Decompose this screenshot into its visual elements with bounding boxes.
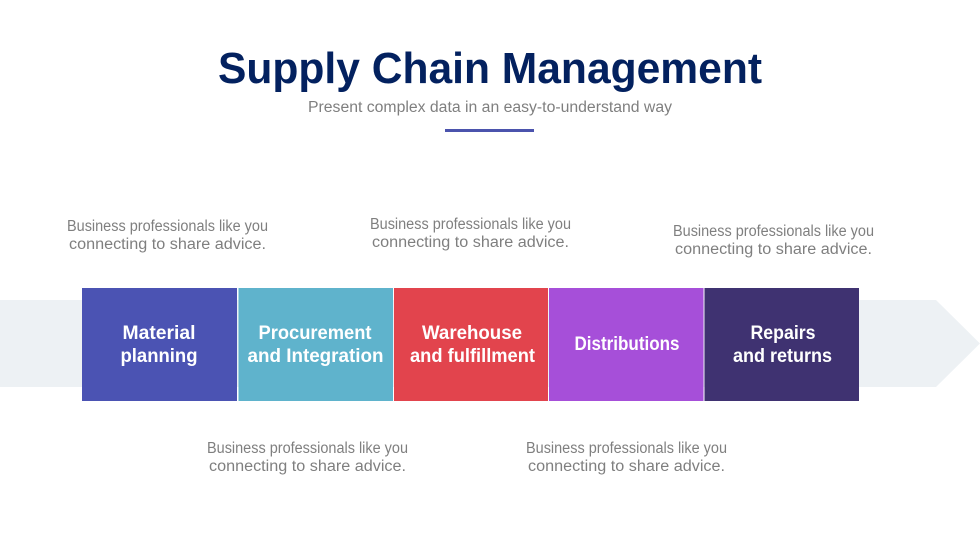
step 1: material planning	[82, 288, 237, 401]
note below step 2: connecting to share advice.	[209, 458, 406, 475]
note below step 4: connecting to share advice.	[528, 458, 725, 475]
subtitle: Present complex data in an easy-to-understand way	[308, 99, 672, 116]
step 5: repairs and returns	[704, 288, 859, 401]
note above step 5: Business professionals like you	[673, 223, 874, 240]
step 2: procurement and integration	[238, 288, 393, 401]
note above step 3	[370, 216, 571, 251]
note above step 1: connecting to share advice.	[69, 236, 266, 253]
step 5: repairs and returns: Repairs	[750, 323, 816, 344]
note above step 3: connecting to share advice.	[372, 234, 569, 251]
step 1: material planning: planning	[120, 346, 198, 367]
step 4: distributions: Distributions	[574, 334, 680, 355]
note above step 5	[673, 223, 874, 258]
process steps	[82, 288, 859, 401]
title: Supply Chain Management	[218, 44, 762, 93]
step 2: procurement and integration: and Integration	[248, 346, 384, 367]
step 5: repairs and returns: and returns	[733, 346, 832, 367]
note above step 1	[67, 218, 268, 253]
step 3: warehouse and fulfillment: and fulfillment	[410, 346, 536, 367]
title underline	[445, 129, 534, 132]
note below step 4	[526, 440, 727, 475]
step 3: warehouse and fulfillment	[394, 288, 548, 401]
note above step 3: Business professionals like you	[370, 216, 571, 233]
step 2: procurement and integration: Procurement	[258, 323, 372, 344]
background arrow	[0, 300, 980, 387]
note below step 2	[207, 440, 408, 475]
step 3: warehouse and fulfillment: Warehouse	[422, 323, 522, 344]
step 4: distributions	[549, 288, 704, 401]
note above step 1: Business professionals like you	[67, 218, 268, 235]
note below step 2: Business professionals like you	[207, 440, 408, 457]
note below step 4: Business professionals like you	[526, 440, 727, 457]
step 1: material planning: Material	[122, 323, 196, 344]
note above step 5: connecting to share advice.	[675, 241, 872, 258]
